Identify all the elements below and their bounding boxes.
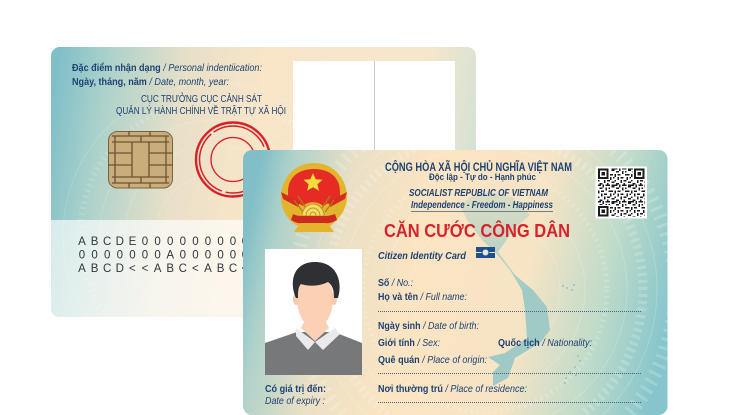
back card background [51,47,476,317]
national emblem [281,163,347,232]
card title: CĂN CƯỚC CÔNG DÂN [384,220,570,241]
front card background [243,150,668,415]
Vietnam map silhouette [460,192,550,386]
expiry label: Có giá trị đến: [265,383,326,395]
date of birth field: Ngày sinh / Date of birth: [378,320,479,332]
front card guilloche pattern [294,150,668,415]
dotted field lines [378,312,641,402]
machine readable strip background [51,220,476,317]
place of residence field: Nơi thường trú / Place of residence: [378,383,527,395]
portrait photo [265,249,362,375]
number field: Số / No.: [378,277,413,289]
fingerprint boxes [293,61,455,161]
machine readable zone: ABCDE000000000 [78,236,248,248]
english country name: SOCIALIST REPUBLIC OF VIETNAM [409,188,549,199]
motto underline [411,211,553,212]
nationality field: Quốc tịch / Nationality: [498,337,592,349]
full name field: Họ và tên / Full name: [378,291,467,303]
personal identification label: Đặc điểm nhận dạng / Personal indentiication: [72,62,262,74]
place of origin field: Quê quán / Place of origin: [378,354,487,366]
motto: Độc lập - Tự do - Hạnh phúc [429,172,536,183]
machine readable zone [78,236,249,275]
issuing authority line 1: CỤC TRƯỞNG CỤC CẢNH SÁT [141,92,262,105]
machine readable zone: ABCD<<ABC<ABC< [78,263,249,275]
country name: CỘNG HÒA XÃ HỘI CHỦ NGHĨA VIỆT NAM [385,161,572,174]
sex field: Giới tính / Sex: [378,337,440,349]
date label: Ngày, tháng, năm / Date, month, year: [72,76,229,88]
icon: identity symbol [476,247,495,258]
machine readable zone: 0000000A000000 [79,250,248,262]
issuing authority line 2: QUẢN LÝ HÀNH CHÍNH VỀ TRẬT TỰ XÃ HỘI [116,104,286,117]
ID card illustration [51,47,668,415]
QR code [596,166,647,218]
icon: red seal [196,122,270,196]
back of card [51,47,476,317]
front of card [243,150,668,415]
icon: chip [108,131,173,188]
back card guilloche pattern [64,103,140,220]
expiry label english: Date of expiry : [265,395,325,407]
english motto: Independence - Freedom - Happiness [411,200,553,211]
islands [562,284,581,384]
card subtitle: Citizen Identity Card [378,250,467,262]
